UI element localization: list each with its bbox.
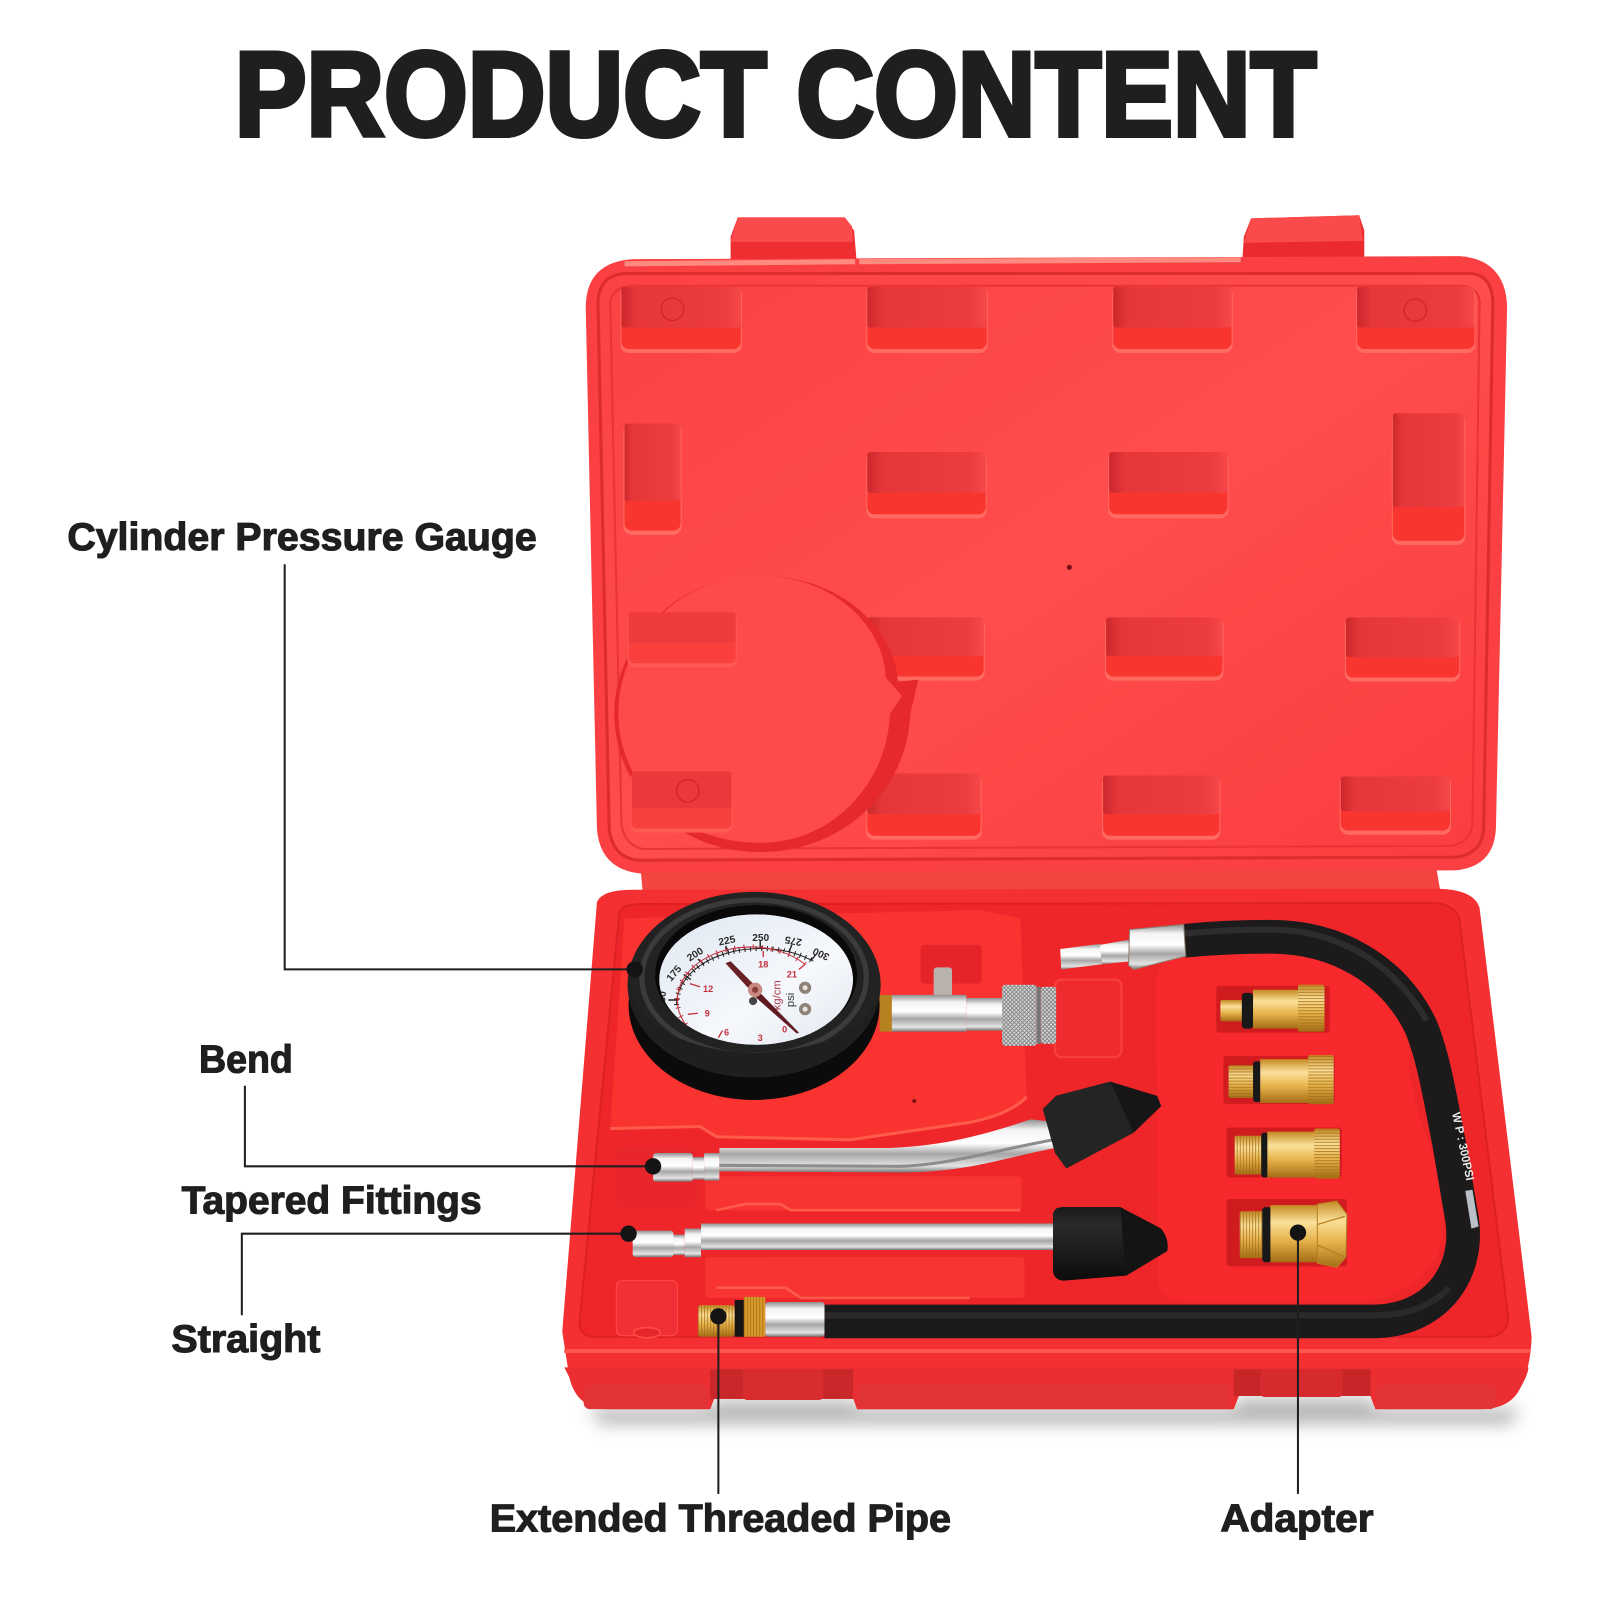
lid hinge tabs (731, 215, 1364, 267)
callout: Bend: Bend (199, 1038, 293, 1081)
upper tool block (705, 1177, 1021, 1210)
recesses inside circle (628, 298, 1427, 833)
base shell (562, 889, 1532, 1409)
adapters (1220, 985, 1347, 1267)
lid recesses (620, 287, 1476, 840)
bent fitting rubber cone (1043, 1082, 1161, 1168)
base pin hole (912, 1099, 916, 1103)
title: PRODUCT CONTENT (235, 29, 1316, 162)
gauge rubber bezel (628, 892, 881, 1078)
callout: Bend (199, 1038, 661, 1174)
psi scale: 300 (811, 945, 831, 962)
psi scale: 225 (718, 934, 737, 949)
psi scale: 175 (665, 964, 685, 984)
psi scale: 150 (657, 991, 669, 1009)
gauge face (657, 914, 853, 1049)
callout: Straight: Straight (171, 1318, 320, 1361)
hose grey band (1465, 1190, 1479, 1229)
raised adapter island (1156, 952, 1444, 1301)
front wall (564, 1367, 1529, 1409)
tray floor (580, 903, 1508, 1337)
callout: Extended Threaded Pipe: Extended Threaded Pipe (490, 1498, 951, 1541)
callout: Cylinder Pressure Gauge (67, 516, 643, 978)
case base (562, 889, 1532, 1409)
hose bottom fitting (698, 1297, 824, 1337)
psi scale: 250 (752, 933, 770, 944)
gauge bed notch (920, 945, 982, 984)
kg/cm scale: 18 (758, 959, 768, 969)
gauge face: psi (785, 993, 797, 1007)
kg/cm scale: 0 (782, 1025, 787, 1035)
gauge bezel lip (629, 985, 880, 1078)
gauge connector (880, 967, 1056, 1046)
kg/cm scale: 21 (787, 970, 797, 980)
psi scale: 275 (784, 933, 803, 947)
straight fitting rubber cone (1053, 1207, 1168, 1281)
label: Tapered Fittings: Tapered Fittings (182, 1179, 482, 1222)
adapter 2 (1229, 1055, 1334, 1104)
lid inner panel (598, 273, 1493, 860)
adapter seats (1216, 986, 1347, 1266)
kg/cm scale (677, 947, 805, 1049)
front wall panels (584, 1369, 1496, 1409)
callout: Cylinder Pressure Gauge: Cylinder Pressure Gauge (67, 516, 537, 559)
hose print: W P : 300PSI (1449, 1111, 1476, 1182)
kg/cm scale: 3 (758, 1033, 763, 1043)
left wells (614, 1147, 700, 1338)
adapter 1 (1220, 985, 1324, 1032)
lid pin hole (1067, 565, 1072, 570)
kg/cm scale: 9 (705, 1008, 710, 1018)
hose top fitting (1060, 924, 1186, 969)
psi scale: 200 (685, 946, 706, 964)
hose (824, 930, 1479, 1321)
gauge screws (799, 982, 811, 1015)
bent compression fitting (653, 1082, 1161, 1182)
callout: Straight (171, 1226, 637, 1361)
ribbed hose channel (1055, 980, 1121, 1057)
case lid (586, 215, 1507, 873)
gauge needle (726, 961, 799, 1034)
psi scale (657, 933, 831, 1009)
adapter 3 (1235, 1129, 1340, 1179)
gauge back housing (629, 910, 880, 1100)
case base shadow (587, 1398, 1520, 1424)
gauge-shaped raised circle in lid (614, 576, 918, 852)
straight compression fitting (633, 1207, 1168, 1281)
cylinder pressure gauge (628, 892, 1056, 1100)
callout: Adapter: Adapter (1220, 1498, 1373, 1541)
rim lip (564, 1349, 1531, 1353)
lid shell (586, 256, 1507, 873)
callout: Adapter (1220, 1224, 1373, 1541)
kg/cm scale: 6 (724, 1028, 729, 1038)
callout: Extended Threaded Pipe (490, 1308, 951, 1541)
gauge unit text: kg/cm (772, 980, 784, 1010)
hinge strip (641, 870, 1441, 894)
lower tool block (705, 1257, 1024, 1298)
panel: open case (562, 215, 1532, 1424)
adapter 4 (1240, 1201, 1347, 1267)
gauge bed (610, 910, 1027, 1140)
kg/cm scale: 12 (703, 984, 713, 994)
